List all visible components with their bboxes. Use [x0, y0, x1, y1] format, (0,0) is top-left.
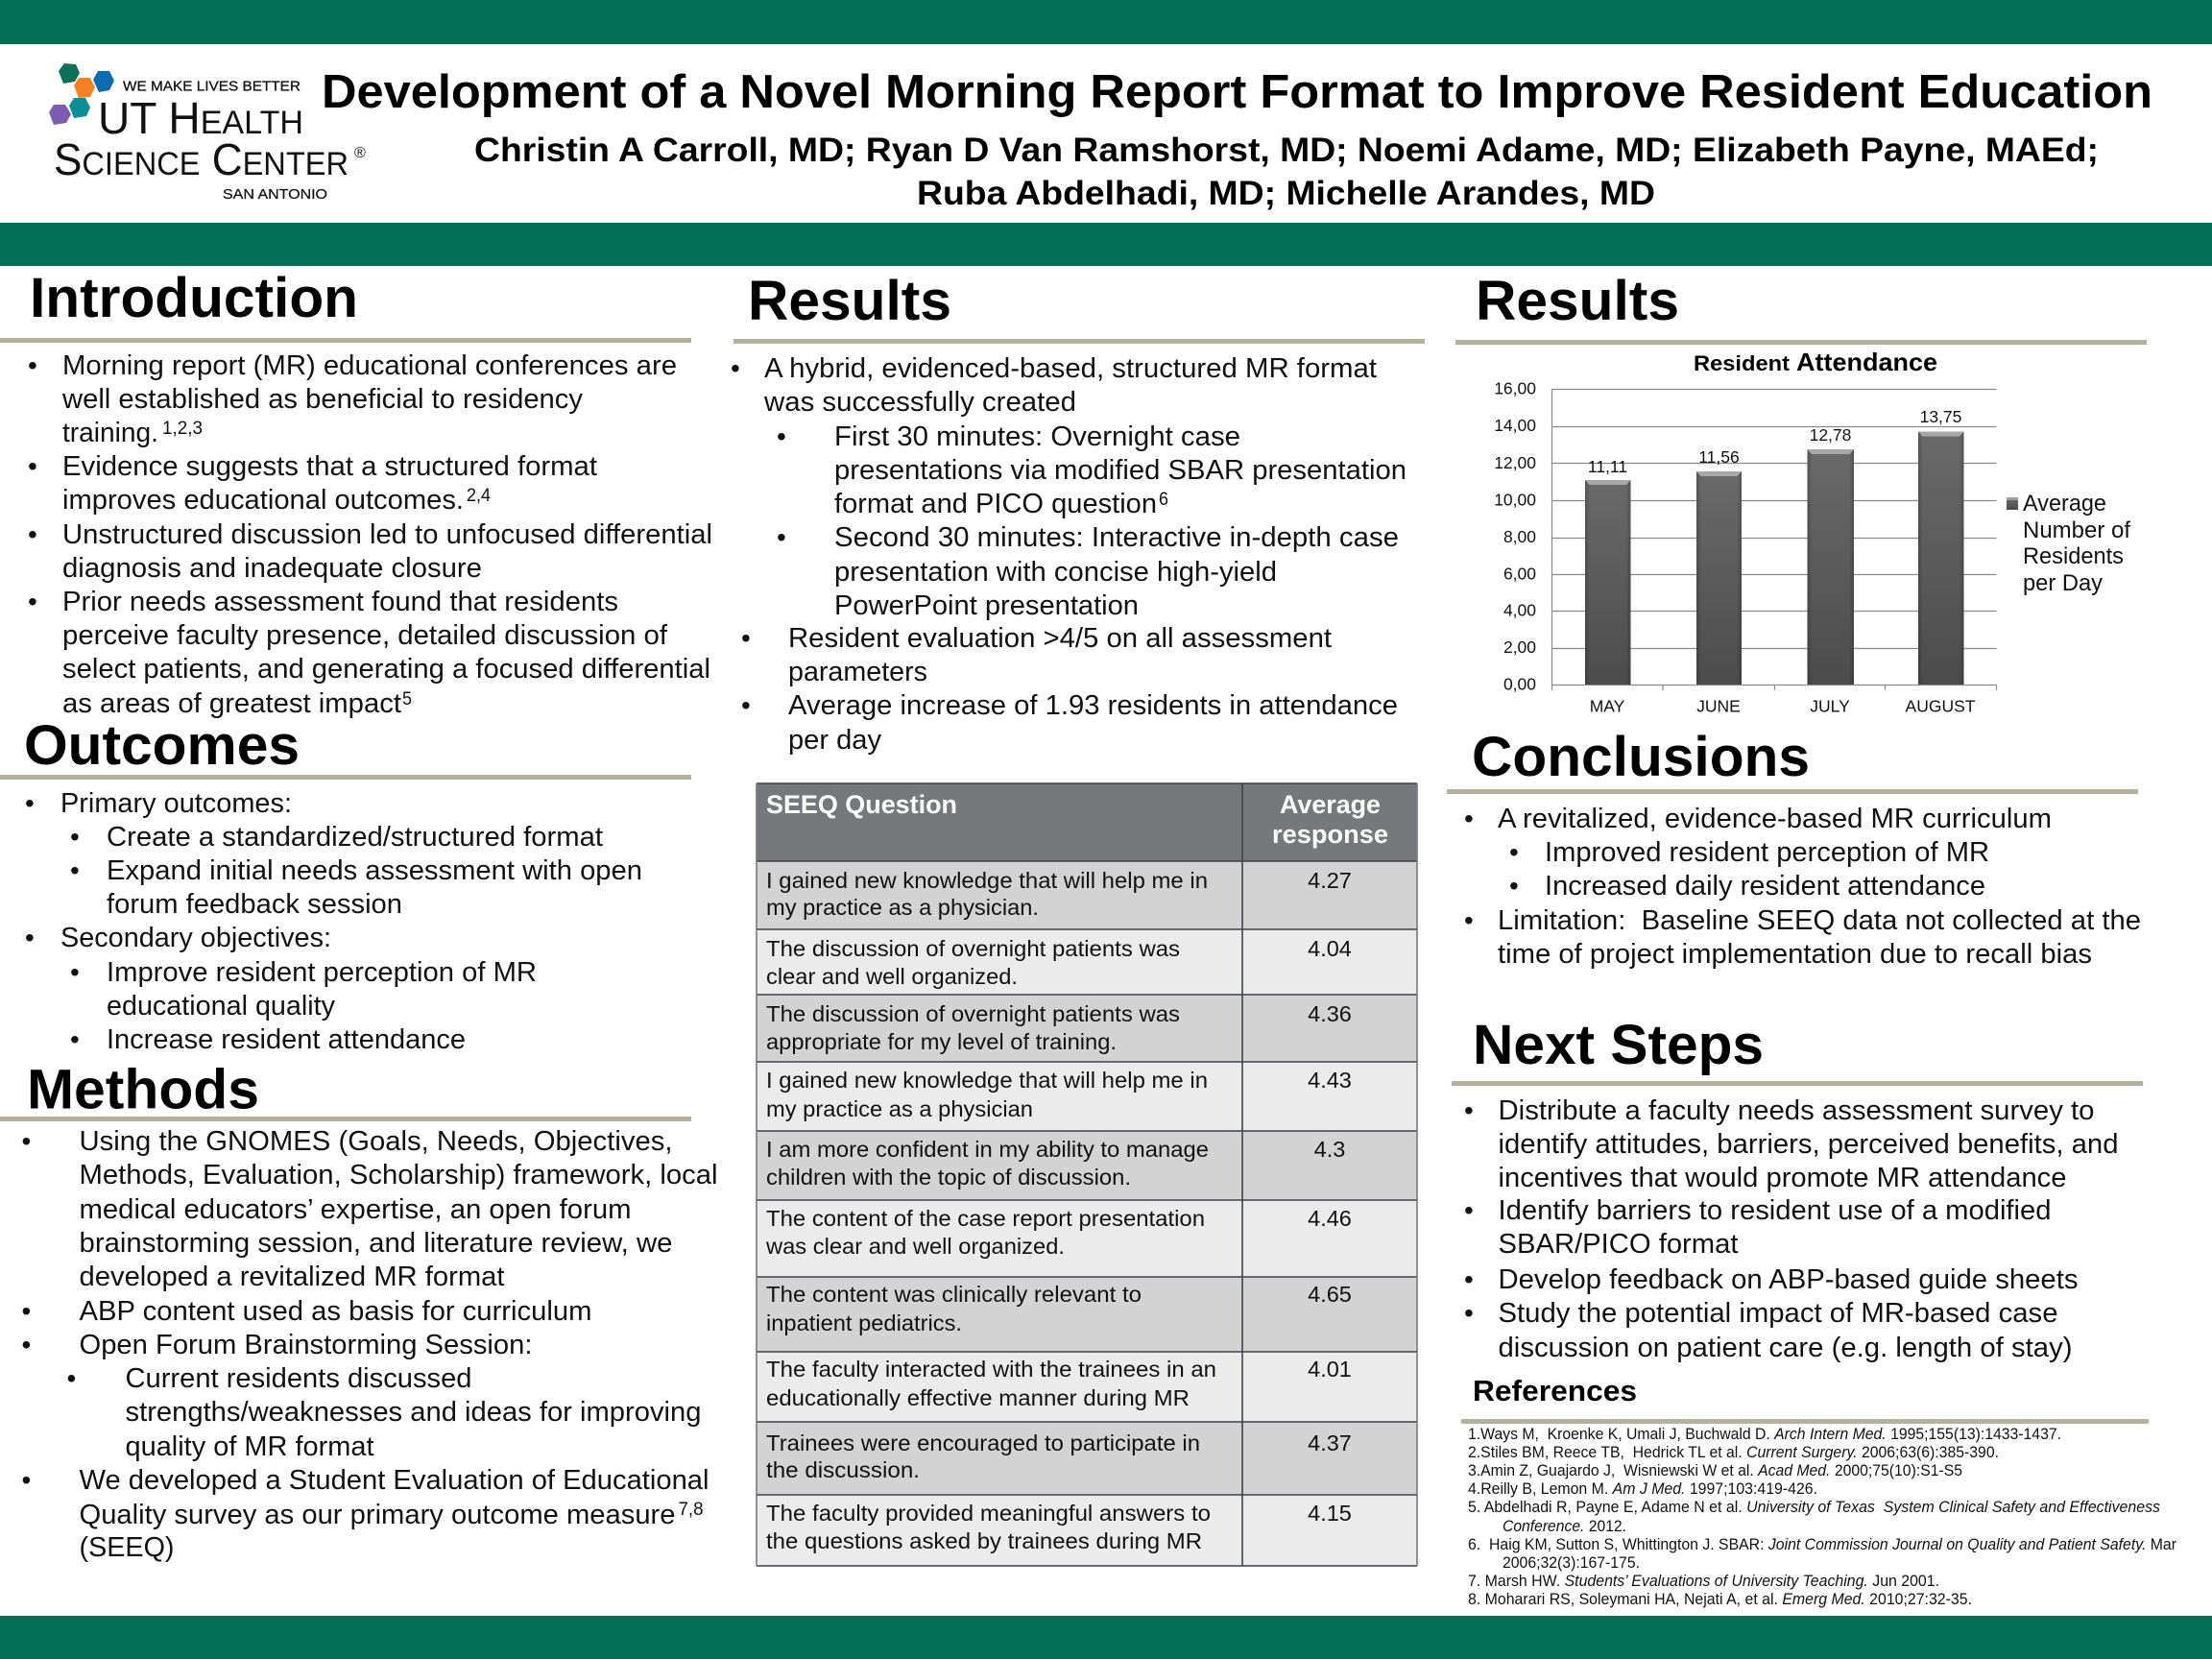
text block: introduction bullets: improves educational outcomes. [62, 485, 464, 516]
table row 8 [766, 1357, 1352, 1410]
table row 4: 4.43 [1308, 1068, 1352, 1093]
bar: June [1696, 447, 1742, 685]
text block: outcomes bullets: Secondary objectives: [60, 923, 331, 953]
text block: reference list: 3.Amin Z, Guajardo J, Wisniewski W et al. Acad Med. 2000;75(10):S1-S5 [1468, 1461, 1962, 1479]
table row 9: Trainees were encouraged to participate in [766, 1431, 1200, 1455]
table row 3: The discussion of overnight patients was [766, 1001, 1180, 1026]
text block: methods bullets: brainstorming session, and literature review, we [79, 1228, 672, 1259]
registered mark: ® [354, 145, 366, 161]
x axis labels: JULY [1810, 697, 1850, 716]
y axis labels: 8,00 [1503, 527, 1536, 546]
text block: conclusions bullets: Limitation: Baseline SEEQ data not collected at the [1498, 905, 2141, 936]
y axis labels: 0,00 [1503, 674, 1536, 693]
text block: introduction bullets: • [28, 451, 37, 481]
heading: Results: Results [1476, 270, 1679, 332]
text block: methods bullets: Using the GNOMES (Goals, Needs, Objectives, [79, 1126, 672, 1157]
text block: methods bullets: Methods, Evaluation, Scholarship) framework, local [79, 1160, 717, 1190]
text block: results bullets: per day [788, 725, 882, 756]
table row 4 [766, 1068, 1352, 1121]
text block: outcomes bullets: • [70, 957, 80, 987]
text block: next steps bullets: identify attitudes, barriers, perceived benefits, and [1498, 1129, 2118, 1160]
text block: outcomes bullets: forum feedback session [107, 889, 402, 920]
second green banner [0, 223, 2212, 266]
table row 1: 4.27 [1308, 868, 1352, 893]
chart legend: Residents [2023, 543, 2124, 569]
bar: August: 13,75 [1920, 407, 1961, 426]
text block: results bullets [731, 353, 1407, 756]
footer green banner [0, 1616, 2212, 1659]
text block: conclusions bullets: • [1509, 837, 1519, 867]
panel: references [1461, 1374, 2176, 1608]
text block: results bullets: presentation with concise high-yield [834, 557, 1277, 588]
x axis labels [1590, 697, 1976, 716]
authors [474, 132, 2099, 212]
text block: introduction bullets: training. [62, 418, 158, 448]
y axis labels: 2,00 [1503, 637, 1536, 657]
table row 6: was clear and well organized. [765, 1234, 1065, 1259]
bar: May [1585, 457, 1630, 685]
table row 3 [766, 1001, 1352, 1054]
text block: introduction bullets: well established as beneficial to residency [61, 384, 584, 415]
text block: introduction bullets [28, 350, 712, 719]
text block: outcomes bullets: Primary outcomes: [60, 788, 292, 819]
text block: reference list: 2.Stiles BM, Reece TB, Hedrick TL et al. Current Surgery. 2006;63(6):385-390. [1468, 1443, 1999, 1461]
authors: Ruba Abdelhadi, MD; Michelle Arandes, MD [917, 175, 1655, 212]
text block: results bullets: A hybrid, evidenced-based, structured MR format [764, 353, 1377, 384]
top green banner [0, 0, 2212, 44]
heading: References: References [1473, 1374, 1637, 1407]
text block: next steps bullets: • [1464, 1095, 1474, 1125]
text block: conclusions bullets: • [1464, 905, 1474, 935]
authors: Christin A Carroll, MD; Ryan D Van Ramshorst, MD; Noemi Adame, MD; Elizabeth Payne, MAEd; [474, 132, 2099, 169]
table row 5: 4.3 [1314, 1137, 1345, 1162]
table row 1 [766, 868, 1352, 920]
text block: reference list [1468, 1425, 2176, 1608]
table row 8: 4.01 [1308, 1357, 1352, 1382]
text block: methods bullets: • [21, 1126, 31, 1156]
logo tagline: WE MAKE LIVES BETTER [123, 79, 301, 94]
text block: outcomes bullets: • [25, 788, 35, 818]
text block: results bullets: Resident evaluation >4/5 on all assessment [788, 623, 1332, 654]
y axis labels: 16,00 [1494, 378, 1536, 397]
heading: Outcomes: Outcomes [24, 714, 300, 777]
chart legend [2007, 491, 2130, 596]
table row 1: I gained new knowledge that will help me in [766, 868, 1208, 893]
text block: outcomes bullets: Expand initial needs assessment with open [107, 855, 642, 886]
panel: methods [0, 1058, 717, 1563]
table row 10: the questions asked by trainees during MR [766, 1528, 1202, 1553]
text block: results bullets: presentations via modified SBAR presentation [834, 455, 1407, 486]
text block: methods bullets: • [21, 1330, 31, 1359]
text block: results bullets: • [777, 421, 786, 451]
table row 5: children with the topic of discussion. [766, 1165, 1131, 1190]
text block: next steps bullets: discussion on patient care (e.g. length of stay) [1498, 1333, 2072, 1363]
text block: introduction bullets: Evidence suggests that a structured format [62, 451, 597, 482]
panel: conclusions [1447, 726, 2141, 970]
text block: next steps bullets: Study the potential impact of MR-based case [1498, 1298, 2058, 1329]
text block: methods bullets: 7,8 [678, 1499, 703, 1520]
text block: results bullets: • [777, 522, 786, 552]
text block: introduction bullets: Morning report (MR) educational conferences are [62, 350, 677, 381]
text block: results bullets: • [741, 623, 751, 653]
panel: outcomes [0, 714, 691, 1055]
table row 2 [766, 936, 1352, 989]
text block: next steps bullets: • [1464, 1298, 1474, 1328]
icon: coloured hexagons [49, 63, 114, 125]
table row 8: The faculty interacted with the trainees in an [766, 1357, 1216, 1382]
text block: results bullets: 6 [1159, 489, 1168, 510]
text block: conclusions bullets [1464, 804, 2141, 970]
text block: reference list: 7. Marsh HW. Students’ Evaluations of University Teaching. Jun 2001. [1468, 1572, 1939, 1590]
table header row [766, 790, 1388, 849]
text block: results bullets: Second 30 minutes: Interactive in-depth case [834, 522, 1399, 553]
text block: methods bullets: developed a revitalized MR format [79, 1262, 505, 1292]
logo wordmark line 2: SCIENCE CENTER [54, 134, 349, 184]
chart title: Resident [1694, 351, 1791, 375]
table row 3: 4.36 [1308, 1001, 1352, 1026]
table row 1: my practice as a physician. [766, 895, 1039, 920]
table row 6 [765, 1206, 1352, 1259]
text block: results bullets: was successfully created [763, 387, 1076, 418]
y axis labels: 6,00 [1503, 565, 1536, 584]
y axis labels [1494, 378, 1536, 693]
text block: next steps bullets: Develop feedback on ABP-based guide sheets [1498, 1264, 2078, 1295]
bar: June: 11,56 [1698, 447, 1740, 467]
table row 10 [766, 1501, 1352, 1553]
text block: methods bullets: • [21, 1465, 31, 1495]
text block: outcomes bullets: educational quality [107, 991, 336, 1022]
text block: methods bullets: strengths/weaknesses and ideas for improving [125, 1397, 701, 1428]
heading: Conclusions: Conclusions [1472, 726, 1810, 788]
text block: outcomes bullets: Create a standardized/structured format [107, 822, 603, 853]
heading: Next Steps: Next Steps [1473, 1014, 1764, 1076]
table row 2: 4.04 [1308, 936, 1352, 961]
heading: Introduction: Introduction [30, 267, 358, 329]
text block: conclusions bullets: A revitalized, evidence-based MR curriculum [1498, 804, 2052, 834]
logo: UT Health Science Center San Antonio [49, 63, 366, 203]
text block: outcomes bullets: Improve resident perception of MR [107, 957, 537, 988]
table row 5: I am more confident in my ability to manage [766, 1137, 1209, 1162]
table row 10: The faculty provided meaningful answers to [766, 1501, 1211, 1526]
text block: methods bullets: medical educators’ expertise, an open forum [79, 1194, 632, 1225]
text block: introduction bullets: • [28, 587, 37, 616]
text block: introduction bullets: 1,2,3 [162, 418, 203, 439]
text block: reference list: 1.Ways M, Kroenke K, Umali J, Buchwald D. Arch Intern Med. 1995;155(13):1433-1437. [1468, 1425, 2061, 1443]
text block: outcomes bullets: • [25, 923, 35, 952]
text block: next steps bullets [1464, 1095, 2118, 1363]
table row 6: 4.46 [1308, 1206, 1352, 1231]
text block: introduction bullets: select patients, and generating a focused differential [62, 654, 710, 685]
text block: methods bullets [21, 1126, 717, 1563]
bar: July: 12,78 [1810, 425, 1851, 445]
text block: conclusions bullets: Improved resident perception of MR [1545, 837, 1989, 868]
y axis labels: 4,00 [1503, 601, 1536, 620]
text block: methods bullets: • [21, 1296, 31, 1326]
y axis labels: 14,00 [1494, 416, 1536, 435]
text block: methods bullets: quality of MR format [125, 1431, 374, 1462]
text block: outcomes bullets: Increase resident attendance [107, 1024, 466, 1055]
heading: Methods: Methods [27, 1058, 259, 1121]
text block: reference list: 6. Haig KM, Sutton S, Whittington J. SBAR: Joint Commission Journal on Quality and Patient Safety. Mar [1468, 1535, 2176, 1553]
text block: results bullets: • [731, 353, 740, 383]
table row 5 [766, 1137, 1345, 1190]
text block: reference list: Conference. 2012. [1503, 1517, 1626, 1535]
table row 9: the discussion. [766, 1457, 920, 1482]
panel: introduction [0, 267, 712, 719]
text block: next steps bullets: Distribute a faculty needs assessment survey to [1498, 1095, 2095, 1126]
table row 7 [766, 1282, 1352, 1335]
logo location: SAN ANTONIO [223, 186, 327, 203]
text block: methods bullets: • [67, 1363, 76, 1393]
text block: outcomes bullets: • [70, 855, 80, 885]
text block: results bullets: Average increase of 1.93 residents in attendance [788, 690, 1398, 721]
y axis labels: 12,00 [1494, 453, 1536, 472]
text block: outcomes bullets [25, 788, 642, 1055]
text block: introduction bullets: Unstructured discussion led to unfocused differential [62, 519, 712, 550]
x axis labels: JUNE [1696, 697, 1741, 716]
text block: methods bullets: Open Forum Brainstorming Session: [79, 1330, 532, 1360]
table row 4: I gained new knowledge that will help me in [766, 1068, 1208, 1093]
text block: introduction bullets: as areas of greatest impact [62, 688, 401, 719]
text block: reference list: 8. Moharari RS, Soleymani HA, Nejati A, et al. Emerg Med. 2010;27:32-35. [1468, 1590, 1972, 1608]
table row 7: The content was clinically relevant to [766, 1282, 1142, 1307]
text block: conclusions bullets: • [1464, 804, 1474, 833]
text block: results bullets: • [741, 690, 751, 720]
table row 9 [766, 1431, 1352, 1482]
text block: introduction bullets: perceive faculty presence, detailed discussion of [62, 620, 667, 651]
heading: Results: Results [748, 270, 951, 332]
chart legend: Average [2023, 491, 2106, 517]
table row 7: inpatient pediatrics. [766, 1310, 962, 1335]
table row 8: educationally effective manner during MR [766, 1385, 1190, 1410]
text block: next steps bullets: Identify barriers to resident use of a modified [1498, 1195, 2051, 1226]
text block: reference list: 4.Reilly B, Lemon M. Am J Med. 1997;103:419-426. [1468, 1479, 1817, 1498]
text block: reference list: 2006;32(3):167-175. [1503, 1553, 1640, 1572]
text block: conclusions bullets: Increased daily resident attendance [1545, 871, 1985, 902]
chart title [1694, 348, 1937, 376]
text block: reference list: 5. Abdelhadi R, Payne E, Adame N et al. University of Texas System Clinical Safety and Effectiveness [1468, 1498, 2160, 1516]
text block: next steps bullets: • [1464, 1195, 1474, 1225]
chart legend: per Day [2023, 570, 2103, 596]
text block: next steps bullets: • [1464, 1264, 1474, 1294]
chart title: Attendance [1796, 348, 1937, 376]
x axis labels: AUGUST [1906, 697, 1976, 716]
text block: results bullets: PowerPoint presentation [834, 590, 1139, 621]
text block: introduction bullets: 5 [402, 688, 412, 709]
text block: introduction bullets: Prior needs assessment found that residents [62, 587, 618, 617]
text block: introduction bullets: 2,4 [467, 485, 491, 506]
table row 6: The content of the case report presentation [766, 1206, 1205, 1231]
text block: results bullets: parameters [788, 657, 927, 687]
table header row: SEEQ Question [766, 790, 957, 819]
text block: outcomes bullets: • [70, 1024, 80, 1054]
panel: results (right column) [1455, 270, 2147, 716]
bar: August [1918, 407, 1964, 685]
table row 7: 4.65 [1308, 1282, 1352, 1307]
text block: conclusions bullets: time of project implementation due to recall bias [1498, 939, 2092, 970]
text block: next steps bullets: SBAR/PICO format [1498, 1229, 1739, 1260]
text block: methods bullets: Quality survey as our primary outcome measure [79, 1500, 676, 1530]
text block: next steps bullets: incentives that would promote MR attendance [1498, 1163, 2066, 1193]
table row 9: 4.37 [1308, 1431, 1352, 1455]
text block: outcomes bullets: • [70, 822, 80, 852]
title: Development of a Novel Morning Report Format to Improve Resident Education [322, 66, 2152, 118]
panel: results (middle column) [731, 270, 1425, 756]
logo wordmark line 1: UT HEALTH [98, 93, 303, 143]
y axis labels: 10,00 [1494, 490, 1536, 509]
text block: methods bullets: (SEEQ) [79, 1532, 175, 1563]
table row 4: my practice as a physician [766, 1096, 1033, 1121]
chart legend: Number of [2023, 517, 2130, 543]
x axis labels: MAY [1590, 697, 1625, 716]
table header row: Average [1280, 790, 1381, 819]
bar: July [1807, 425, 1854, 685]
table row 3: appropriate for my level of training. [766, 1029, 1117, 1054]
text block: methods bullets: We developed a Student Evaluation of Educational [79, 1465, 709, 1496]
text block: results bullets: First 30 minutes: Overnight case [834, 421, 1240, 452]
table row 10: 4.15 [1308, 1501, 1352, 1526]
bar chart: Resident Attendance [1494, 348, 2130, 716]
table: SEEQ questions and average responses [757, 783, 1417, 1566]
text block: introduction bullets: • [28, 350, 37, 380]
text block: methods bullets: ABP content used as basis for curriculum [79, 1296, 591, 1327]
panel: next steps [1452, 1014, 2143, 1363]
text block: methods bullets: Current residents discussed [125, 1363, 472, 1394]
text block: introduction bullets: • [28, 519, 37, 549]
table row 2: clear and well organized. [766, 964, 1018, 989]
text block: conclusions bullets: • [1509, 871, 1519, 901]
table header row: response [1272, 820, 1388, 849]
bar: May: 11,11 [1588, 457, 1627, 476]
table row 2: The discussion of overnight patients was [766, 936, 1180, 961]
text block: introduction bullets: diagnosis and inadequate closure [62, 553, 482, 584]
text block: results bullets: format and PICO question [834, 489, 1157, 519]
